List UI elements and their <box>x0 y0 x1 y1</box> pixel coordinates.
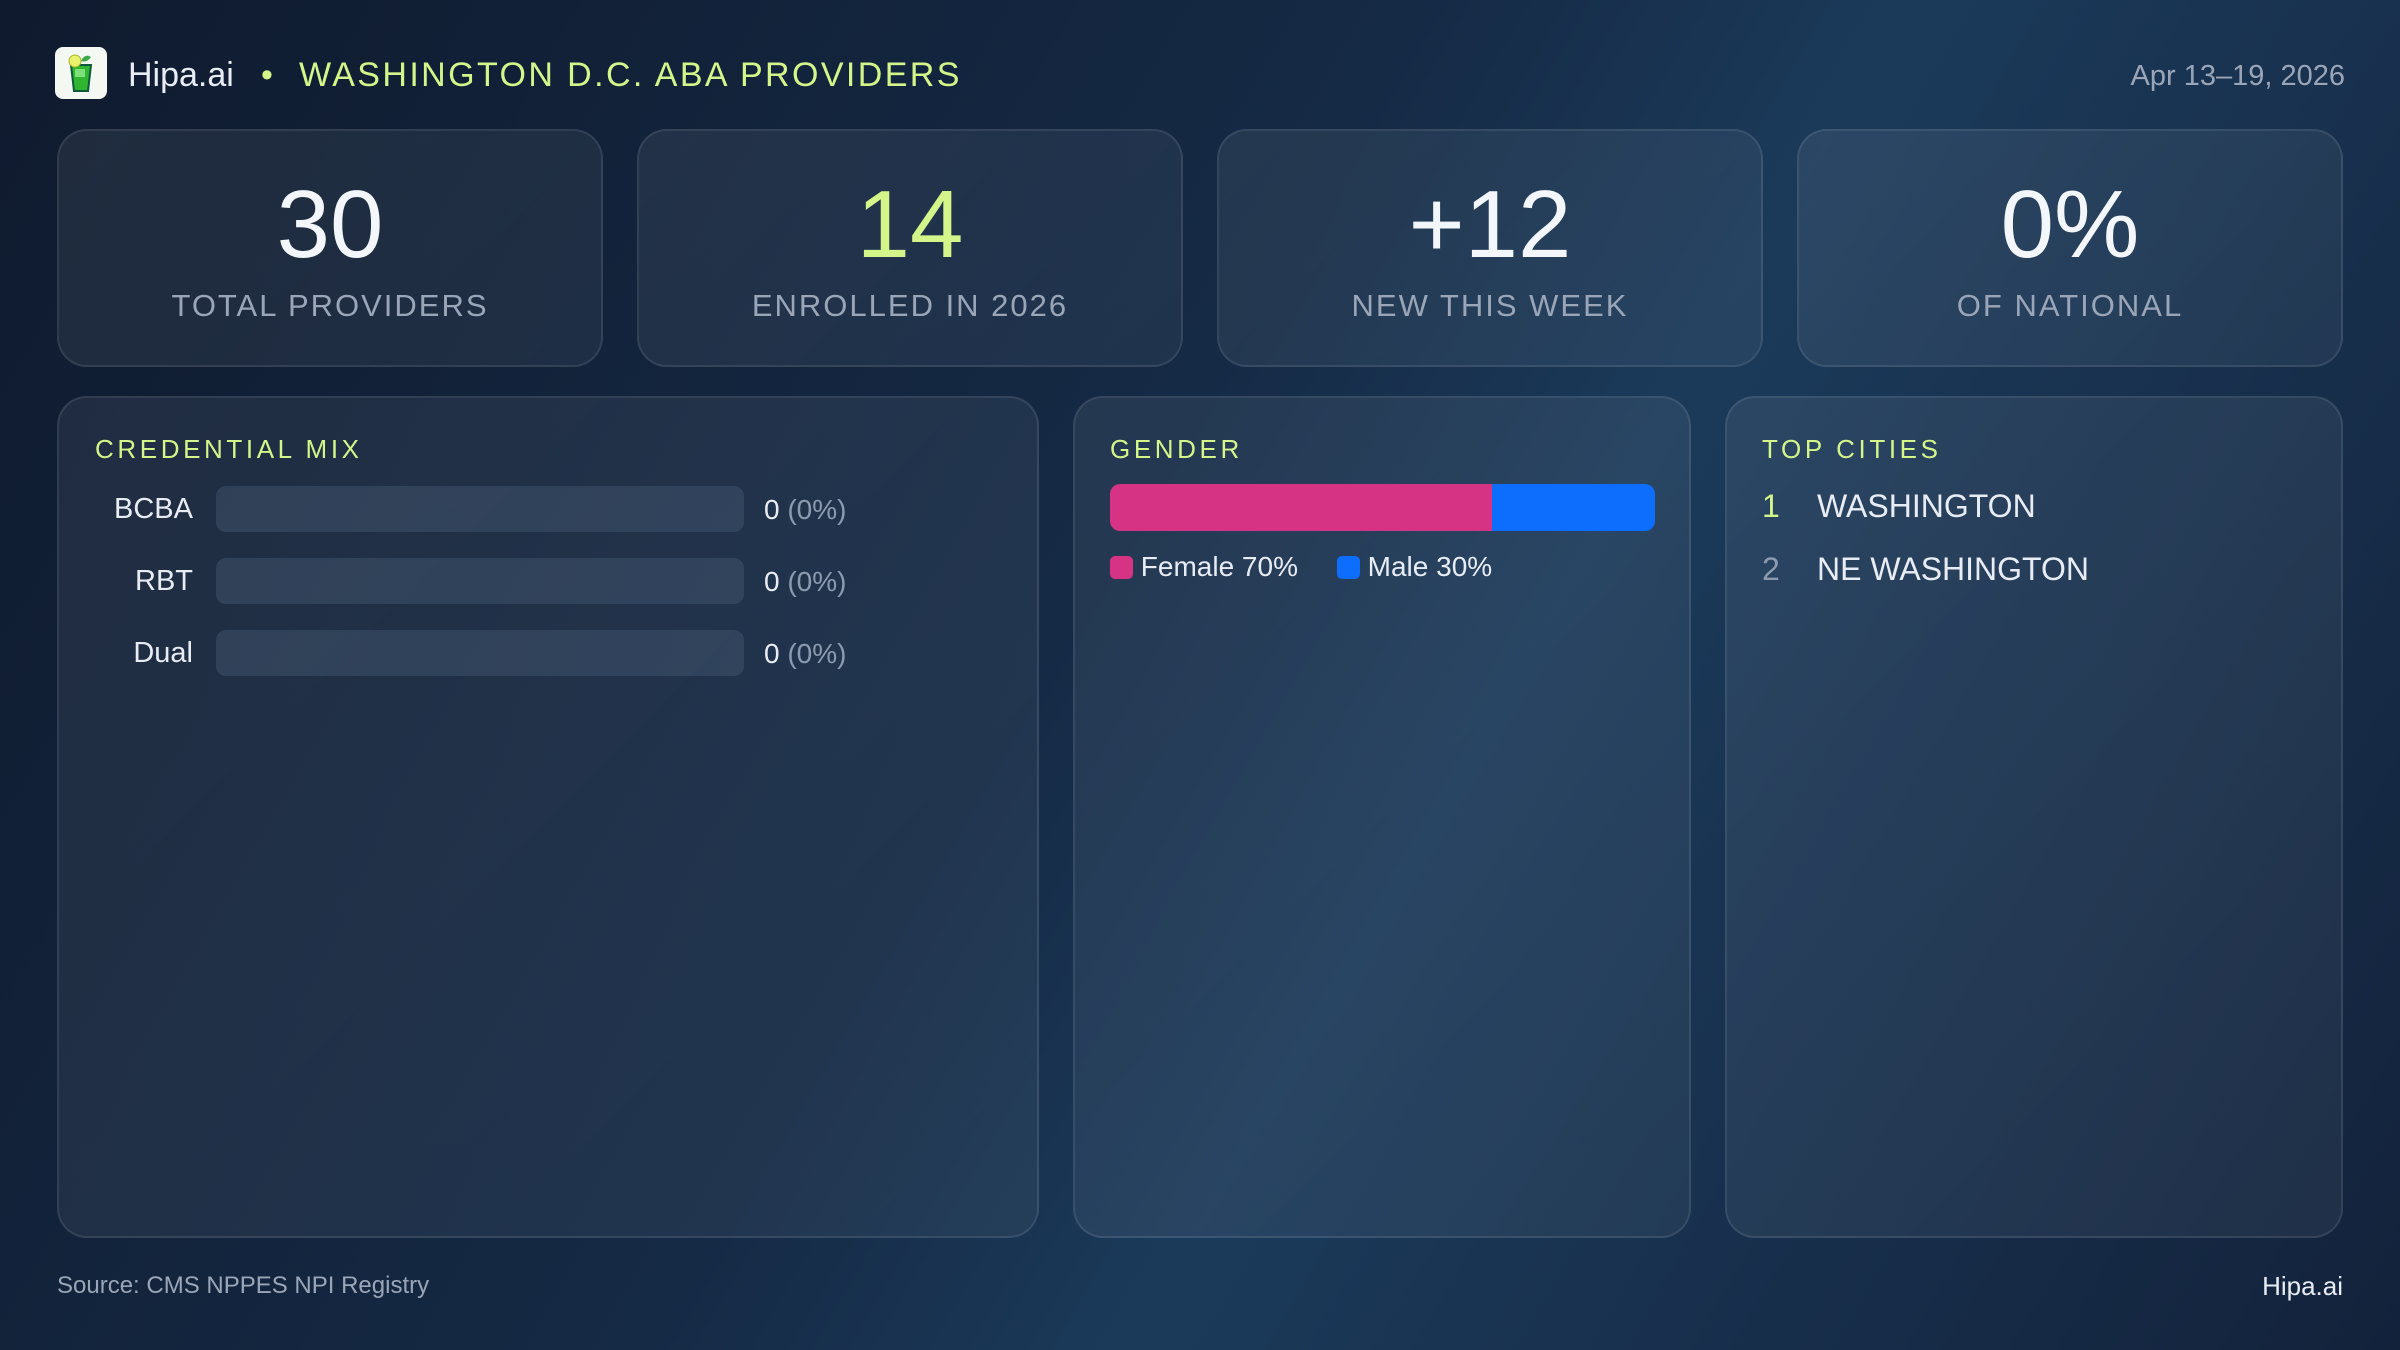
panel: credential mix <box>57 396 1039 1238</box>
row RBT: 0 (0%) <box>764 566 846 597</box>
footer source: Source: CMS NPPES NPI Registry <box>57 1272 429 1299</box>
stat card: national: OF NATIONAL <box>1957 288 2183 323</box>
legend: Female 70% Male 30% <box>1141 551 1492 582</box>
city 2: NE WASHINGTON <box>1817 551 2089 587</box>
stacked bar <box>1110 484 1655 531</box>
date: Apr 13–19, 2026 <box>2131 60 2345 92</box>
stat card: total: 30 <box>277 171 383 278</box>
brand: Hipa.ai <box>128 56 234 94</box>
row BCBA <box>114 486 846 532</box>
header <box>55 47 2345 99</box>
panel: gender <box>1073 396 1691 1238</box>
stat card: enrolled: 14 <box>857 171 963 278</box>
footer brand: Hipa.ai <box>2262 1271 2343 1301</box>
stat card: total: TOTAL PROVIDERS <box>171 288 489 323</box>
stat card: new: +12 <box>1409 171 1571 278</box>
heading: CREDENTIAL MIX <box>95 434 363 464</box>
icon: logo <box>55 47 107 99</box>
row RBT: RBT <box>135 565 193 597</box>
row RBT <box>135 558 846 604</box>
stat card: total <box>57 129 603 367</box>
city 1: 1 <box>1762 488 1780 524</box>
title: • WASHINGTON D.C. ABA PROVIDERS <box>261 56 962 94</box>
heading: TOP CITIES <box>1762 434 1942 464</box>
stat card: new: NEW THIS WEEK <box>1352 288 1628 323</box>
row BCBA: 0 (0%) <box>764 494 846 525</box>
city 2: 2 <box>1762 551 1780 587</box>
panel: top cities <box>1725 396 2343 1238</box>
row Dual: 0 (0%) <box>764 638 846 669</box>
stat card: enrolled: ENROLLED IN 2026 <box>752 288 1068 323</box>
stat card: national: 0% <box>2001 171 2139 278</box>
stat card: national <box>1797 129 2343 367</box>
stat card: enrolled <box>637 129 1183 367</box>
row Dual <box>133 630 846 676</box>
row BCBA: BCBA <box>114 493 193 525</box>
heading: GENDER <box>1110 434 1243 464</box>
row Dual: Dual <box>133 637 193 669</box>
stat card: new <box>1217 129 1763 367</box>
city 1: WASHINGTON <box>1817 488 2036 524</box>
